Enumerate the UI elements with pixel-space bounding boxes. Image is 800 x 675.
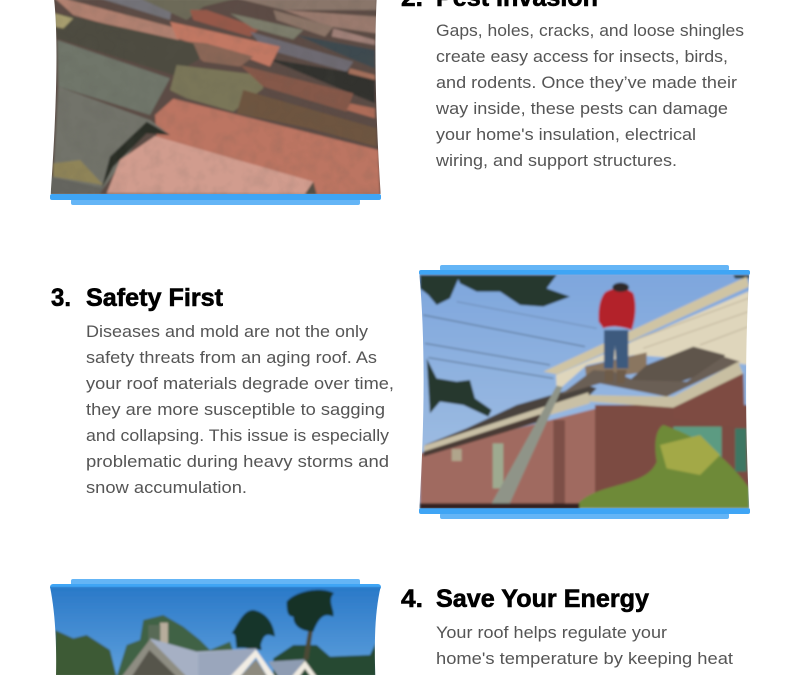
text block: pest invasion description (435, 21, 744, 170)
text block: pest invasion description: your home's insulation, electrical (436, 125, 696, 144)
text block: pest invasion description: wiring, and support structures. (435, 151, 677, 170)
heading: 4. Save Your Energy: Save Your Energy (436, 585, 649, 613)
text block: safety first description (86, 322, 394, 497)
text block: pest invasion description: Gaps, holes, cracks, and loose shingles (436, 21, 744, 40)
text block: safety first description: snow accumulation. (86, 478, 247, 497)
text block: safety first description: they are more susceptible to sagging (86, 400, 385, 419)
text block: safety first description: problematic during heavy storms and (86, 452, 389, 471)
text block: safety first description: and collapsing. This issue is especially (86, 426, 390, 445)
heading: 4. Save Your Energy: 4. (401, 585, 423, 613)
text block: pest invasion description: create easy access for insects, birds, (436, 47, 728, 66)
photo: weathered clay roof tiles (47, 0, 383, 195)
photo: roofer standing on damaged roof (417, 273, 753, 510)
panel: house with palm trees photo (47, 579, 383, 675)
photo: house with gabled metal roof (47, 587, 383, 675)
heading: 3. Safety First: 3. (51, 284, 71, 312)
text block: safety first description: safety threats from an aging roof. As (86, 348, 377, 367)
text block: save your energy description (436, 623, 733, 668)
text block: save your energy description: Your roof helps regulate your (436, 623, 667, 642)
accent: blue bars above and below roofer photo (419, 265, 750, 519)
text block: safety first description: your roof materials degrade over time, (86, 374, 394, 393)
section 4: save your energy (401, 585, 733, 668)
heading: 3. Safety First: Safety First (86, 284, 224, 312)
text block: save your energy description: home's temperature by keeping heat (436, 649, 733, 668)
text block: pest invasion description: way inside, these pests can damage (435, 99, 728, 118)
text block: pest invasion description: and rodents. Once they’ve made their (436, 73, 737, 92)
panel: roof tiles photo (47, 0, 383, 205)
accent: blue bars below tiles photo (50, 194, 381, 205)
text block: safety first description: Diseases and mold are not the only (86, 322, 369, 341)
section 3: safety first (51, 284, 394, 497)
accent: blue bars above house photo (50, 579, 381, 590)
panel: roofer photo (417, 265, 753, 519)
section 2: pest invasion (401, 0, 744, 170)
